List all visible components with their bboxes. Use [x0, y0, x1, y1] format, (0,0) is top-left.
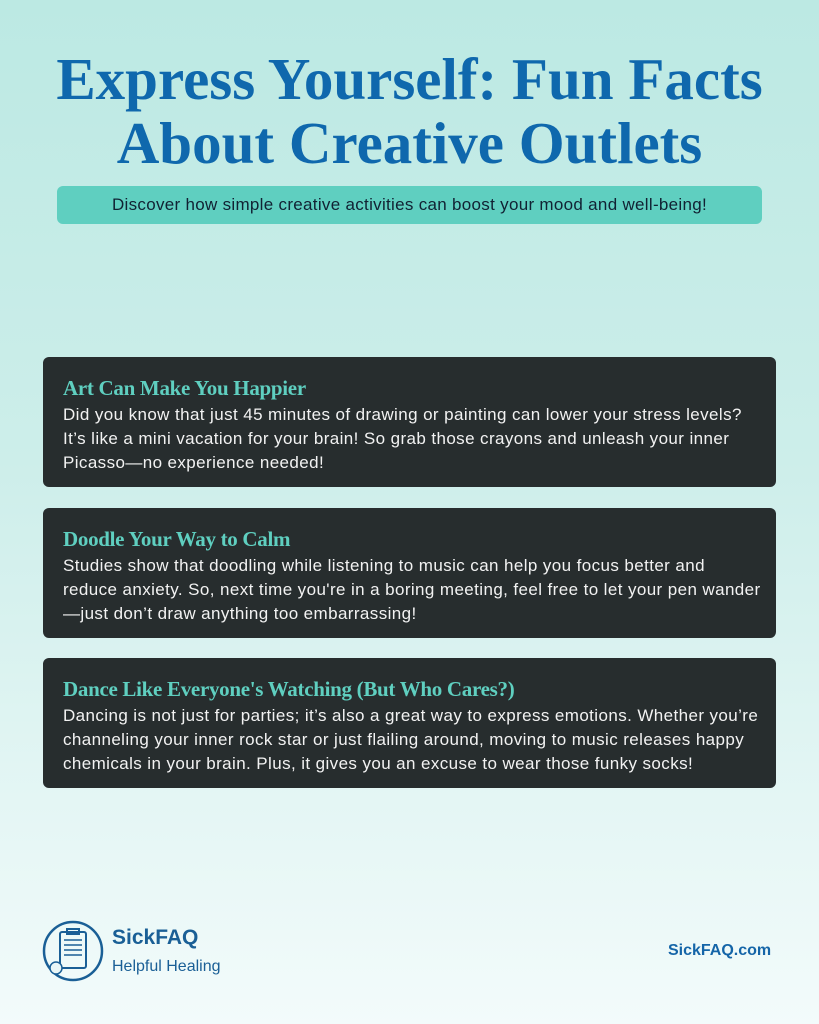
text: art [63, 405, 742, 472]
brand name: SickFAQ [112, 926, 198, 949]
title: Express Yourself: Fun Facts [56, 46, 763, 112]
icon: clipboard [42, 920, 104, 982]
tagline: Helpful Healing [112, 958, 221, 975]
text: art: Did you know that just 45 minutes of drawing or painting can lower your stress levels? [63, 405, 742, 424]
heading: art: Art Can Make You Happier [63, 376, 306, 400]
subtitle banner [57, 186, 762, 224]
text: dance: channeling your inner rock star or just flailing around, moving to music releases happy [63, 730, 744, 749]
logo [42, 920, 221, 982]
text: art: Picasso—no experience needed! [63, 453, 324, 472]
text: dance: Dancing is not just for parties; it’s also a great way to express emotions. Whether you’re [63, 706, 758, 725]
text: dance: chemicals in your brain. Plus, it gives you an excuse to wear those funky socks! [63, 754, 693, 773]
text: doodle [63, 556, 761, 623]
text: dance [63, 706, 758, 773]
text: doodle: reduce anxiety. So, next time you're in a boring meeting, feel free to let your pen wander [63, 580, 761, 599]
panel: art [43, 357, 776, 487]
heading: dance: Dance Like Everyone's Watching (But Who Cares?) [63, 677, 514, 701]
text: doodle: —just don’t draw anything too embarrassing! [63, 604, 417, 623]
heading: doodle: Doodle Your Way to Calm [63, 527, 290, 551]
text: art: It’s like a mini vacation for your brain! So grab those crayons and unleash your inner [63, 429, 729, 448]
panel: dance [43, 658, 776, 788]
website url: SickFAQ.com [668, 942, 771, 959]
text: doodle: Studies show that doodling while listening to music can help you focus better and [63, 556, 705, 575]
subtitle banner: Discover how simple creative activities can boost your mood and well-being! [112, 195, 707, 214]
panel: doodle [43, 508, 776, 638]
title [56, 46, 763, 176]
title: About Creative Outlets [117, 110, 702, 176]
